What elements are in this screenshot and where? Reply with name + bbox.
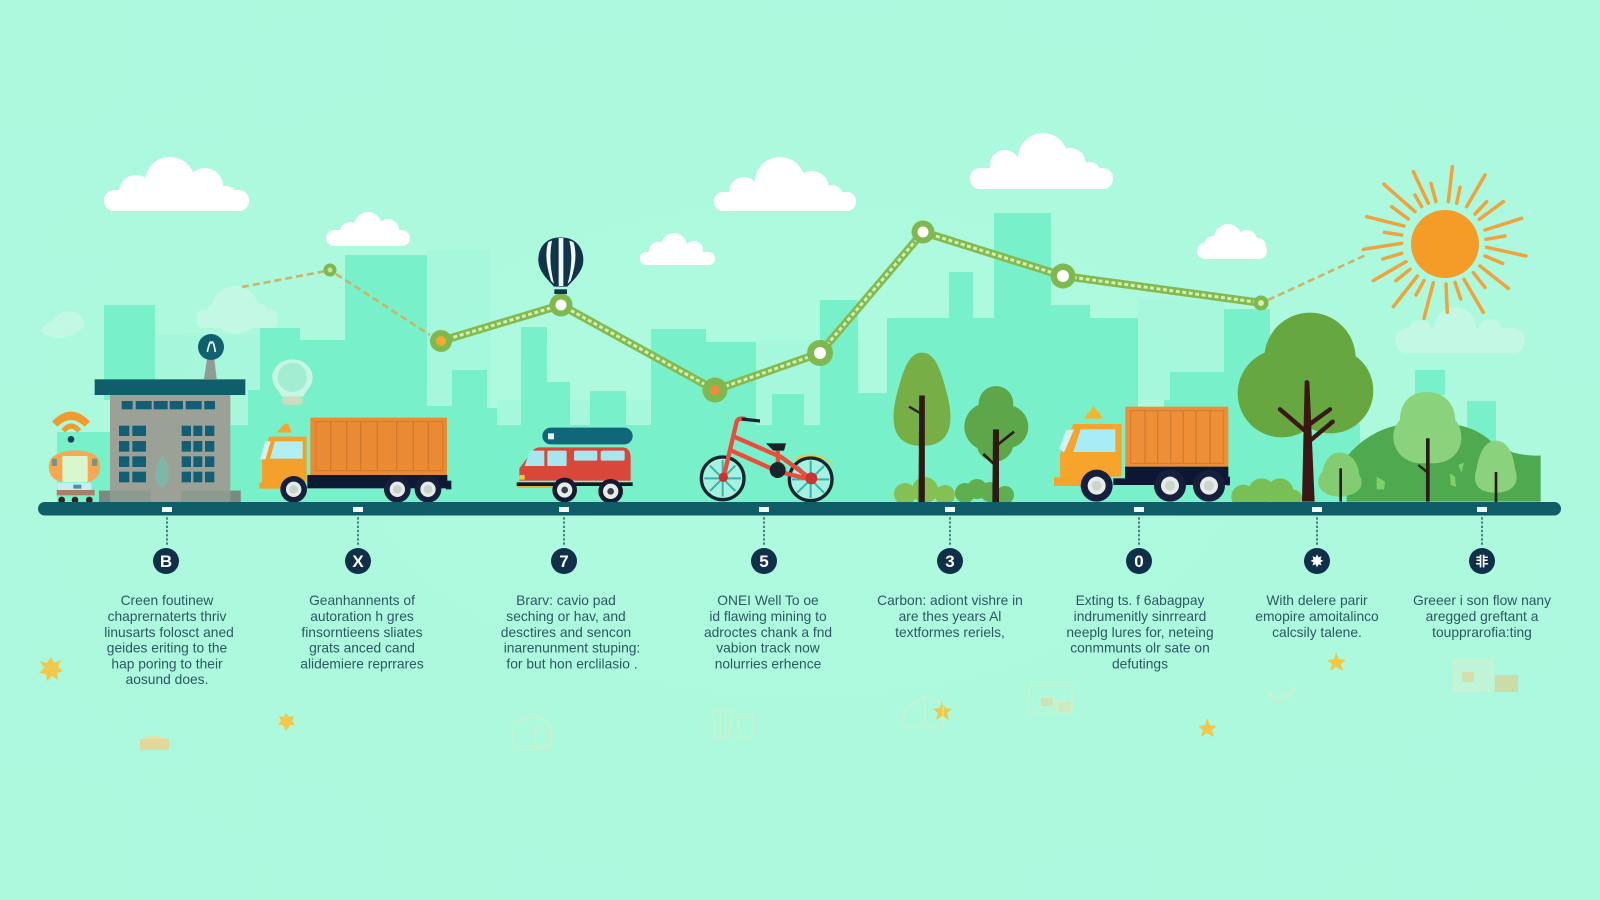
- sun: [1363, 167, 1526, 318]
- step text 1: aosund does.: [126, 672, 208, 687]
- step text 5: textformes reriels,: [895, 625, 1005, 640]
- factory building: [95, 334, 245, 502]
- light bulb: [272, 359, 313, 405]
- step text 8: Greeer i son flow nany: [1413, 593, 1551, 608]
- step text 4: nolurries erhence: [715, 656, 822, 672]
- yellow stars: [39, 652, 1346, 737]
- white clouds: [104, 133, 1267, 265]
- step text 6: indrumenitly sinrreard: [1074, 609, 1206, 624]
- light tree centre: [1393, 392, 1461, 502]
- step text 3: seching or hav, and: [506, 609, 626, 624]
- step text 5: Carbon: adiont vishre in: [877, 593, 1023, 608]
- step text 4: vabion track now: [716, 640, 820, 656]
- step text 7: calcsily talene.: [1272, 625, 1362, 640]
- step text 3: Brarv: cavio pad: [516, 593, 616, 608]
- step text 2: alidemiere reprrares: [300, 656, 424, 672]
- step text 3: desctires and sencon: [501, 625, 631, 640]
- small trees: [894, 353, 1028, 502]
- step text 6: Exting ts. f 6abagpay: [1076, 593, 1205, 608]
- cloud 1: [104, 157, 249, 211]
- step text 1: geides eriting to the: [107, 640, 228, 656]
- pale cloud right: [1395, 307, 1525, 353]
- step text 2: finsorntieens sliates: [301, 625, 423, 640]
- step text 1: linusarts folosct aned: [104, 625, 234, 640]
- step text 1: hap poring to their: [111, 656, 223, 672]
- step markers: [153, 548, 1495, 574]
- orange truck 2: [1054, 406, 1230, 502]
- orange truck 1: [259, 418, 451, 503]
- step text 3: inarenunment stuping:: [504, 640, 640, 656]
- light tree left: [1318, 453, 1362, 502]
- faint decorative icons: [140, 660, 1518, 750]
- step text 4: ONEI Well To oe: [717, 593, 819, 608]
- step text 1: chaprernaterts thriv: [108, 609, 227, 624]
- step markers: 5: [759, 552, 769, 571]
- timeline road: [38, 502, 1561, 546]
- step markers: ✸: [1310, 552, 1324, 572]
- red van: [517, 428, 633, 504]
- chart nodes: [324, 220, 1268, 402]
- step text 7: emopire amoitalinco: [1255, 609, 1379, 624]
- step markers: 7: [559, 552, 569, 571]
- wifi robot: [49, 412, 100, 503]
- step text 2: autoration h gres: [310, 609, 414, 624]
- step text 1: Creen foutinew: [121, 593, 213, 608]
- cloud 5: [640, 233, 715, 265]
- pale clouds: [40, 286, 1525, 353]
- step markers: X: [352, 552, 364, 571]
- cloud 2: [326, 212, 410, 246]
- bushes under small trees: [894, 477, 1014, 505]
- hill and right forest: [1231, 313, 1541, 509]
- light tree right: [1475, 441, 1517, 502]
- step markers: 3: [945, 552, 955, 571]
- sustainability line chart: [242, 220, 1368, 402]
- cloud 6: [1197, 224, 1267, 259]
- step markers: B: [160, 552, 172, 571]
- step text 4: adroctes chank a fnd: [704, 625, 832, 640]
- pale cloud left: [197, 286, 278, 334]
- city skyline background: [57, 213, 1496, 502]
- step text 6: conmmunts olr sate on: [1070, 640, 1210, 656]
- step text 2: Geanhannents of: [309, 593, 415, 608]
- step text 4: id flawing mining to: [709, 609, 827, 624]
- cloud 3: [714, 157, 856, 211]
- big tree: [1238, 313, 1373, 502]
- step text 5: are thes years Al: [899, 609, 1001, 624]
- red bicycle: [701, 417, 835, 501]
- step text 6: neeplg lures for, neteing: [1066, 625, 1214, 640]
- step text 3: for but hon erclilasio .: [506, 656, 638, 672]
- step text 6: defutings: [1112, 656, 1168, 672]
- step markers: 0: [1134, 552, 1144, 571]
- step text 2: grats anced cand: [309, 640, 415, 656]
- step text 8: aregged greftant a: [1426, 609, 1539, 624]
- step markers: 非: [1475, 554, 1489, 569]
- step text 8: toupprarofia:ting: [1432, 625, 1532, 640]
- cloud 4: [970, 133, 1113, 189]
- hot air balloon: [538, 237, 583, 294]
- step text 7: With delere parir: [1266, 593, 1368, 608]
- timeline ticks: [162, 507, 1487, 512]
